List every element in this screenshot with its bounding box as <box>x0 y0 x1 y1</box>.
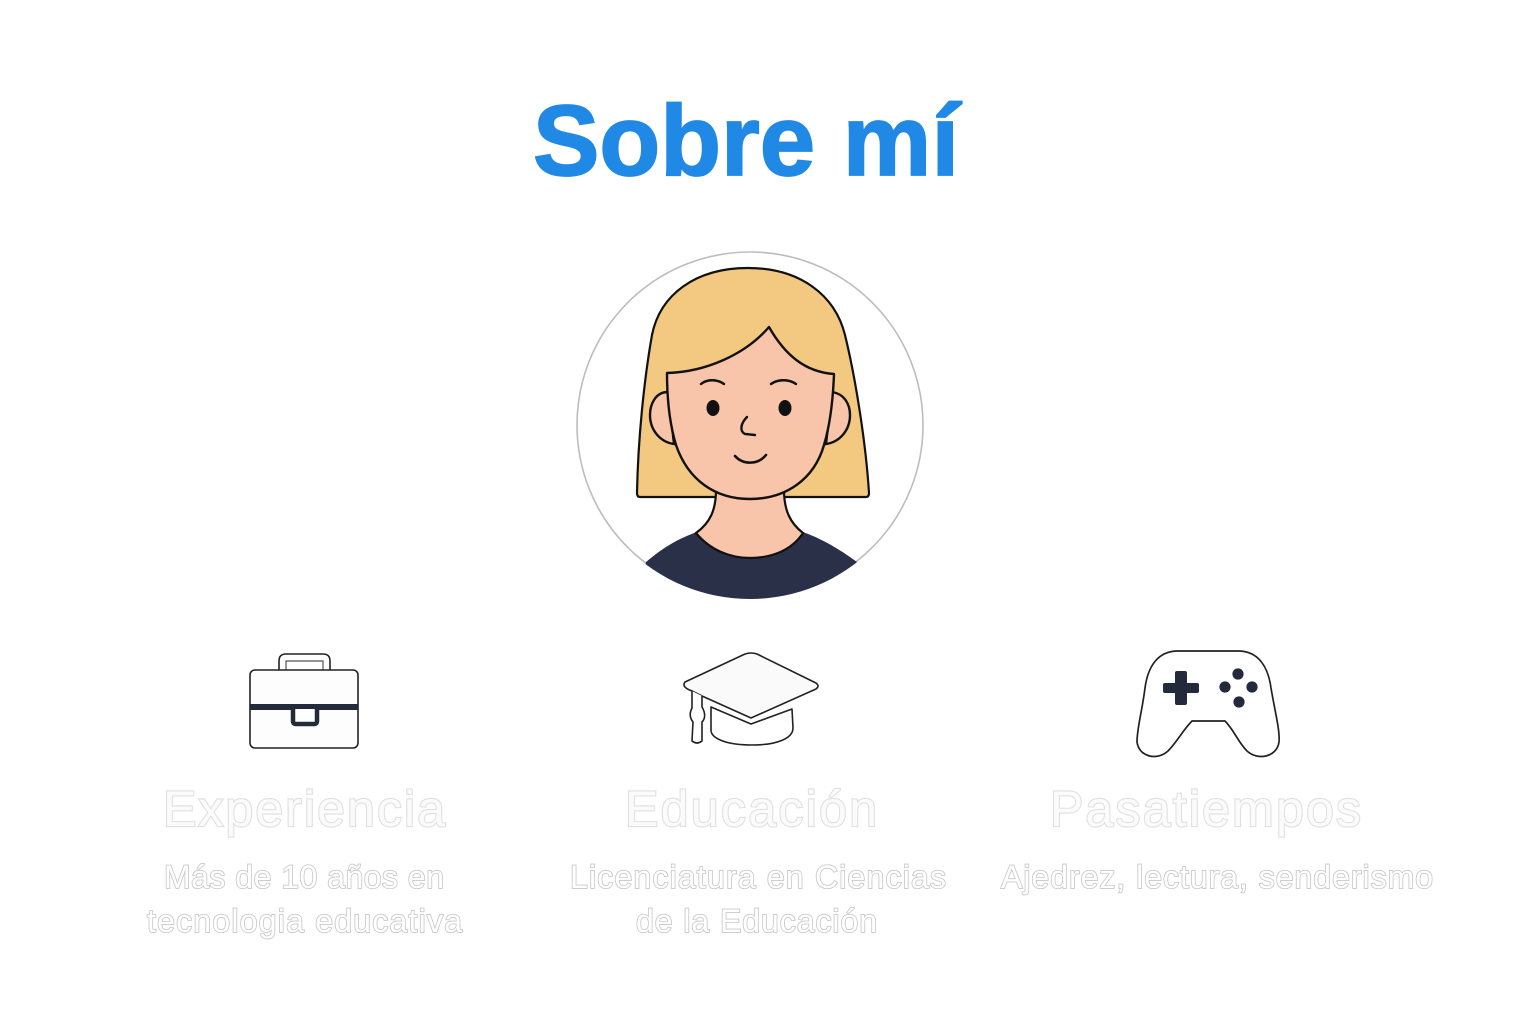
text block: educación: Educación <box>625 781 877 837</box>
portrait avatar <box>577 252 923 600</box>
ears <box>650 392 674 444</box>
text block: pasatiempos <box>1001 781 1433 895</box>
nose <box>741 417 755 435</box>
text block: experiencia: Más de 10 años en <box>164 859 444 895</box>
icon: graduation cap <box>684 653 818 745</box>
text block: educación: Licenciatura en Ciencias <box>570 859 946 895</box>
text block: educación <box>570 781 946 939</box>
text block: educación: de la Educación <box>636 903 877 939</box>
mouth <box>735 455 766 463</box>
eyes <box>706 400 720 416</box>
text block: pasatiempos: Pasatiempos <box>1050 781 1361 837</box>
icon: briefcase <box>250 654 358 748</box>
text block: experiencia <box>147 781 462 939</box>
neck <box>696 490 803 558</box>
text block: experiencia: tecnologia educativa <box>147 903 462 939</box>
shirt <box>640 532 860 600</box>
icon: game controller <box>1137 651 1279 757</box>
title: Sobre mí <box>533 85 962 197</box>
text block: pasatiempos: Ajedrez, lectura, senderismo <box>1001 859 1433 895</box>
hair <box>637 268 869 497</box>
eyebrows <box>701 380 724 384</box>
text block: experiencia: Experiencia <box>163 781 445 837</box>
face <box>667 327 834 499</box>
